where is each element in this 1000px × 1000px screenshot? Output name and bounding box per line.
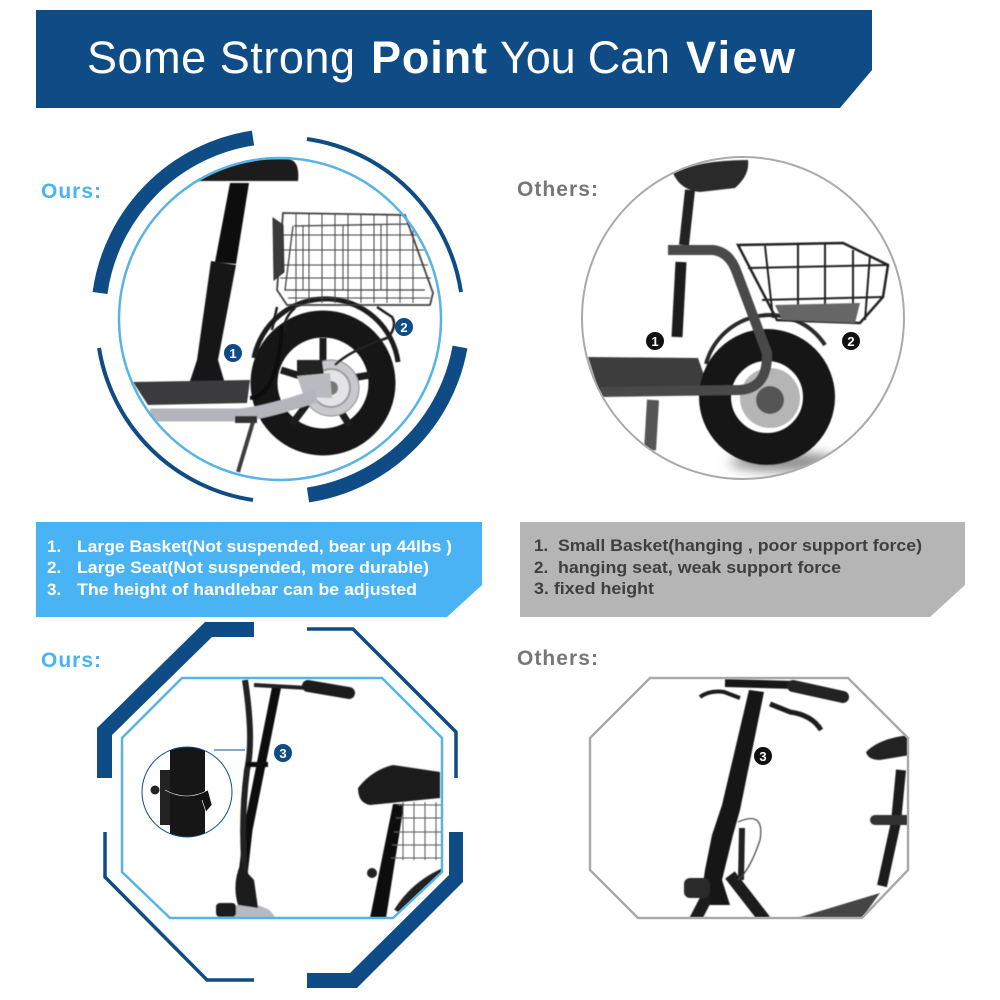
title: View: [686, 32, 796, 83]
badge 3: [754, 747, 772, 765]
scooter photo: others handlebar: [684, 683, 910, 920]
badge 3: 3: [759, 749, 767, 764]
list text: [47, 537, 452, 599]
badge 1: [646, 332, 664, 350]
list text: 2.: [47, 558, 61, 577]
panel: others handlebar octagon: [590, 678, 910, 920]
list text: 1.: [47, 537, 61, 556]
wire basket: [272, 213, 433, 335]
inner circle outline: [119, 158, 441, 480]
badge 3: [274, 744, 292, 762]
badge 2: [842, 332, 860, 350]
circle outline: [582, 157, 904, 479]
list text: 3. fixed height: [534, 579, 654, 598]
octagon outline: [590, 678, 908, 918]
title: Some Strong: [87, 32, 355, 83]
octagon frame: [97, 622, 463, 988]
scooter photo: others rear: [588, 160, 840, 471]
badge 3: 3: [279, 746, 287, 761]
list text: 2.: [534, 558, 548, 577]
panel: ours basket and seat circle: [99, 138, 461, 500]
list text: 3.: [47, 580, 61, 599]
title: [87, 32, 796, 83]
metal basket: [738, 243, 888, 323]
badge 1: 1: [229, 346, 237, 361]
panel: others basket and seat circle: [582, 157, 904, 479]
badge 1: 1: [651, 334, 659, 349]
list text: Small Basket(hanging , poor support force): [558, 536, 922, 555]
inner octagon outline: [122, 678, 442, 918]
scooter photo: ours handlebar: [216, 680, 445, 936]
heading: others top: Others:: [517, 178, 598, 201]
list text: The height of handlebar can be adjusted: [77, 580, 417, 599]
circular frame arcs: [99, 138, 461, 500]
heading: ours bottom: Ours:: [41, 649, 101, 672]
list text: hanging seat, weak support force: [558, 558, 841, 577]
badge 1: [224, 344, 242, 362]
header banner: [36, 10, 872, 108]
list text: 1.: [534, 536, 548, 555]
title: Point: [371, 32, 487, 83]
list text: [534, 536, 922, 598]
scooter photo: ours rear: [133, 159, 398, 472]
heading: others bottom: Others:: [517, 647, 598, 670]
callout: others feature list: [520, 522, 965, 617]
badge 2: 2: [400, 320, 408, 335]
title: You Can: [500, 32, 670, 83]
list text: Large Seat(Not suspended, more durable): [77, 558, 429, 577]
badge 2: [395, 318, 413, 336]
badge 2: 2: [847, 334, 855, 349]
panel: ours handlebar octagon: [97, 622, 463, 988]
callout: ours feature list: [36, 522, 482, 617]
heading: ours top: Ours:: [41, 180, 101, 203]
zoom inset: height clamp: [142, 745, 245, 840]
list text: Large Basket(Not suspended, bear up 44lbs ): [77, 537, 452, 556]
